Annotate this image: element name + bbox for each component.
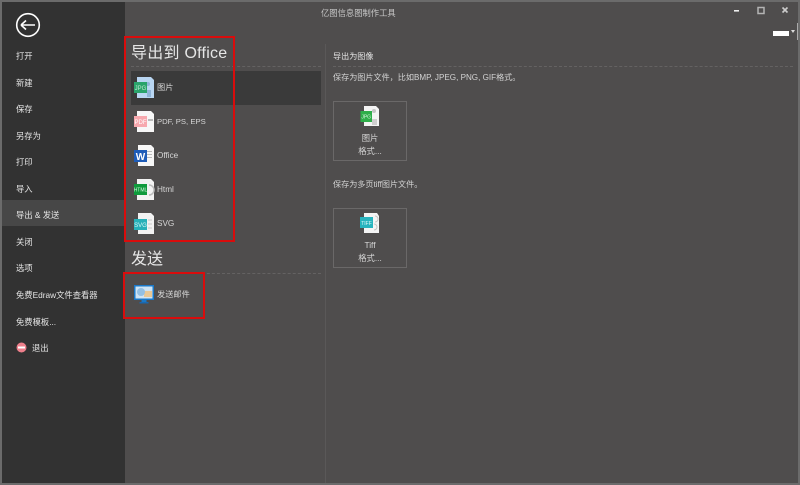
button: image format: [333, 101, 407, 161]
window controls: [734, 6, 788, 14]
icon: image: [134, 77, 154, 98]
menu item: save as: 另存为: [16, 130, 41, 140]
account box: [773, 31, 789, 36]
icon: tiff file: [360, 213, 379, 233]
button: tiff format: Tiff: [364, 240, 376, 250]
menu item: close: 关闭: [16, 237, 33, 247]
label: html: Html: [157, 185, 174, 194]
menu item: free Edraw viewer: 免费Edraw文件查看器: [16, 290, 98, 300]
menu item: options: 选项: [16, 263, 33, 273]
menu item: open: 打开: [16, 51, 33, 61]
icon: tiff file: TIFF: [361, 221, 372, 227]
button: tiff format: 格式...: [358, 253, 382, 263]
menu item: new: 新建: [16, 78, 33, 88]
menu item: print: 打印: [16, 157, 33, 167]
account dropdown arrow: [791, 30, 795, 35]
menu item: exit: 退出: [32, 342, 49, 352]
icon: pdf: [134, 111, 154, 132]
button: tiff format: [333, 208, 407, 268]
menu item: import: 导入: [16, 184, 33, 194]
icon: svg: SVG: [134, 223, 147, 229]
description: tiff: 保存为多页tiff图片文件。: [333, 180, 422, 189]
label: pdf ps eps: PDF, PS, EPS: [157, 117, 206, 126]
icon: exit: [16, 342, 26, 352]
icon: pdf: PDF: [134, 120, 147, 126]
description: image formats: 保存为图片文件，比如BMP, JPEG, PNG, GIF格式。: [333, 73, 520, 82]
button: image format: 格式...: [358, 146, 382, 156]
scrollbar: [797, 23, 798, 40]
label: send mail: 发送邮件: [157, 290, 190, 299]
red highlight: export list: [124, 36, 234, 242]
heading: send: 发送: [131, 251, 163, 268]
icon: send mail: [134, 285, 154, 304]
icon: svg: [134, 213, 154, 234]
button: image format: 图片: [362, 133, 378, 143]
red highlight: send mail: [123, 272, 205, 319]
icon: back arrow: [16, 12, 40, 38]
label: image: 图片: [157, 83, 173, 92]
label: office: Office: [157, 151, 178, 160]
heading: export to office: 导出到 Office: [131, 45, 227, 62]
icon: jpg file: JPG: [361, 114, 371, 120]
label: svg: SVG: [157, 219, 174, 228]
menu item: export and send: 导出 & 发送: [16, 210, 59, 220]
icon: jpg file: [360, 106, 379, 126]
window title: 亿图信息图制作工具: [321, 8, 396, 18]
icon: word: [134, 145, 154, 166]
panel: sidebar: [2, 2, 125, 483]
sidebar selected row highlight: [2, 200, 125, 226]
menu item: free templates: 免费模板...: [16, 316, 56, 326]
menu item: save: 保存: [16, 104, 33, 114]
icon: image: JPG: [135, 86, 147, 92]
icon: word: W: [136, 152, 146, 163]
icon: html: [134, 179, 155, 200]
heading: export as image: 导出为图像: [333, 52, 373, 60]
icon: html: HTML: [134, 188, 148, 194]
selected list row: [131, 71, 321, 105]
